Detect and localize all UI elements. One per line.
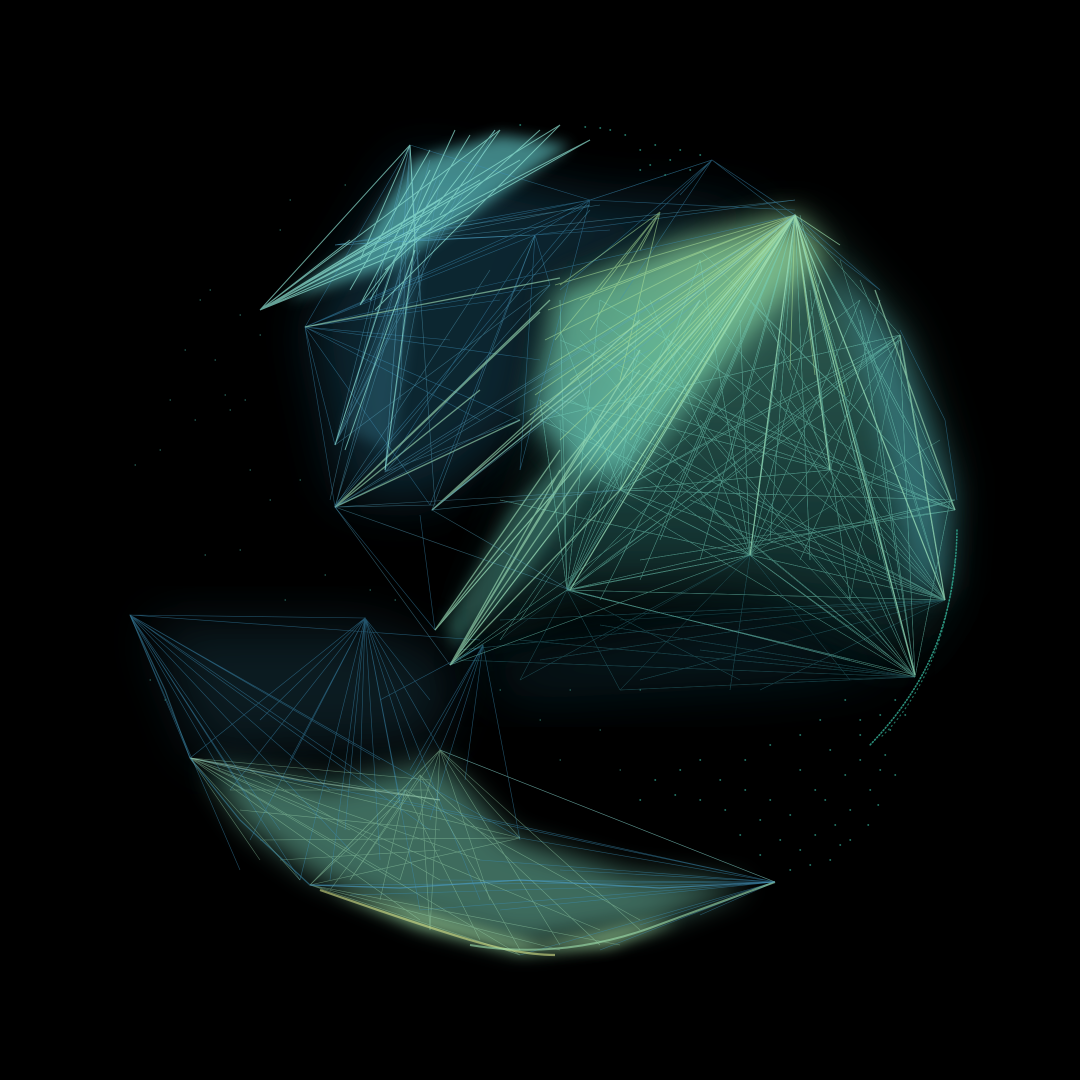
region: top left bright fan	[285, 135, 570, 300]
top left bright fan	[260, 125, 590, 470]
region: upper left dim blue	[310, 160, 780, 500]
glow regions	[150, 135, 950, 953]
right rim dotted arc	[870, 530, 957, 745]
region: lower left wedge toward hub	[445, 410, 620, 650]
hub fan: upper right bright lines	[530, 212, 845, 490]
faint lines lower hemisphere	[460, 555, 945, 690]
bottom rim bright curve	[130, 615, 775, 955]
strong spokes	[305, 215, 955, 675]
region: left spikes	[345, 260, 418, 450]
region: central bright fan	[530, 215, 825, 485]
region: bottom bright rim	[330, 890, 680, 953]
region: lower middle fade	[470, 610, 905, 700]
scattered outlier dots	[135, 125, 906, 870]
dim blue line fans	[130, 145, 957, 955]
bottom line fans	[190, 750, 775, 955]
lines from the left spokes into the bright zone	[330, 130, 795, 665]
region: lower left fan	[150, 625, 460, 755]
region: right hemisphere	[460, 225, 945, 660]
teal line fans right hemisphere	[435, 215, 955, 677]
region: right rim	[830, 260, 950, 590]
region: bottom crescent	[205, 760, 750, 945]
